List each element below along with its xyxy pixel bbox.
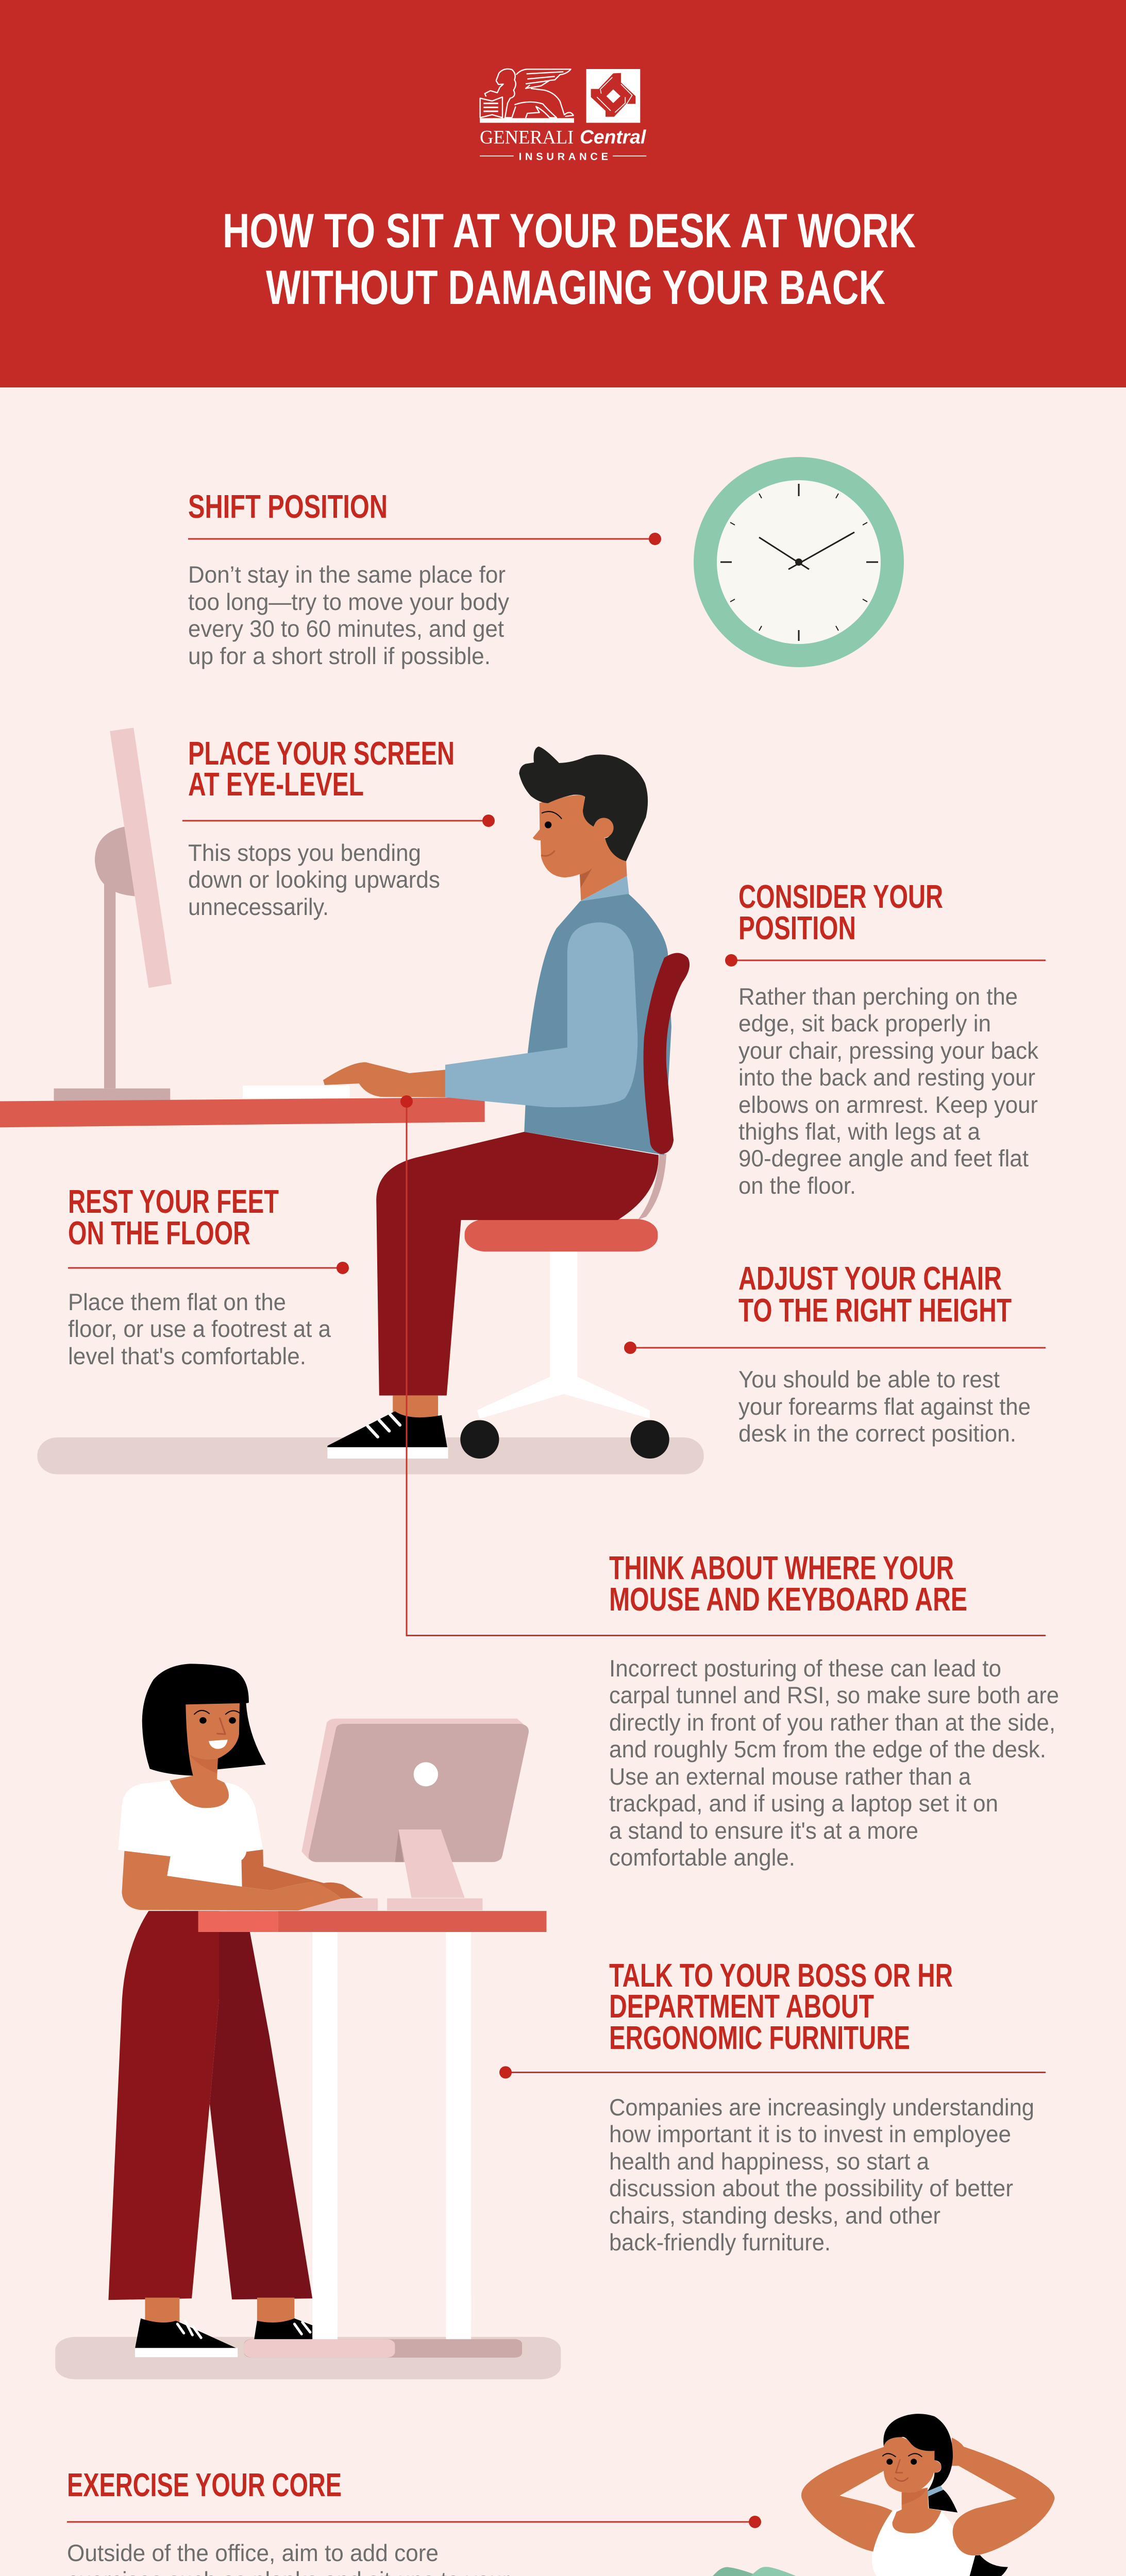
callout line [725, 954, 1046, 967]
heading: place your screen: PLACE YOUR SCREEN [188, 735, 455, 772]
chair base [460, 1154, 669, 1459]
body text [188, 561, 509, 669]
body text: trackpad, and if using a laptop set it on [609, 1790, 998, 1817]
body text: Don’t stay in the same place for [188, 561, 506, 588]
body text [188, 839, 440, 920]
body text: thighs flat, with legs at a [738, 1118, 980, 1145]
illustration: woman at standing desk [55, 1664, 561, 2379]
body text: Use an external mouse rather than a [609, 1763, 971, 1790]
heading: CONSIDER YOUR [738, 878, 943, 915]
floor [37, 1437, 704, 1475]
panel: mouse and keyboard [609, 1549, 1059, 1871]
body text: down or looking upwards [188, 866, 440, 893]
body text: carpal tunnel and RSI, so make sure both are [609, 1682, 1059, 1708]
icon: clock [694, 457, 904, 667]
body text [609, 2094, 1034, 2256]
body text: and roughly 5cm from the edge of the desk. [609, 1736, 1046, 1762]
heading: POSITION [738, 909, 856, 946]
title: HOW TO SIT AT YOUR DESK AT WORK [223, 204, 916, 258]
arm and hand [323, 922, 637, 1107]
logo: Generali Central Insurance: INSURANCE [519, 151, 608, 162]
logo: Generali Central Insurance: GENERALI [480, 126, 574, 148]
body text [738, 1366, 1031, 1447]
heading [609, 1957, 953, 2056]
body text: health and happiness, so start a [609, 2148, 929, 2175]
body text: floor, or use a footrest at a [68, 1315, 331, 1342]
heading: place your screen [188, 735, 455, 803]
body text: up for a short stroll if possible. [188, 642, 491, 669]
heading: ON THE FLOOR [68, 1214, 250, 1251]
callout line [188, 533, 661, 545]
body text: Place them flat on the [68, 1289, 286, 1315]
body text: every 30 to 60 minutes, and get [188, 615, 504, 642]
body text: unnecessarily. [188, 893, 329, 920]
heading [68, 1183, 279, 1251]
title [223, 204, 916, 314]
desk, monitor, trousers [108, 1719, 546, 2321]
body text: your forearms flat against the [738, 1393, 1031, 1420]
body text: 90-degree angle and feet flat [738, 1145, 1029, 1172]
body text: Companies are increasingly understanding [609, 2094, 1034, 2121]
heading [609, 1549, 967, 1618]
body text: your chair, pressing your back [738, 1037, 1039, 1064]
panel: screen at eye level [0, 727, 495, 1127]
heading: ADJUST YOUR CHAIR [738, 1260, 1002, 1297]
panel: consider your position [725, 878, 1046, 1199]
heading [738, 1260, 1012, 1329]
body text [738, 983, 1039, 1199]
body text: too long—try to move your body [188, 588, 509, 615]
trousers [376, 1132, 659, 1396]
heading: shift position: SHIFT POSITION [188, 488, 388, 525]
body text: Incorrect posturing of these can lead to [609, 1655, 1001, 1682]
heading: TO THE RIGHT HEIGHT [738, 1292, 1012, 1329]
heading: ERGONOMIC FURNITURE [609, 2019, 910, 2056]
connector line from desk to mouse and keyboard section [400, 1095, 1046, 1635]
chair seat [465, 1219, 658, 1251]
body text: level that's comfortable. [68, 1343, 306, 1369]
panel: ergonomic furniture [499, 1957, 1046, 2256]
floor and desk base [55, 2295, 561, 2379]
foot and shoe [327, 1396, 448, 1459]
body text: Rather than perching on the [738, 983, 1018, 1010]
body text: back-friendly furniture. [609, 2229, 831, 2256]
heading [738, 878, 943, 946]
logo: Generali Central Insurance: Central [580, 126, 646, 147]
callout line [68, 1262, 349, 1274]
callout line [67, 2516, 761, 2528]
body text: directly in front of you rather than at the side, [609, 1709, 1055, 1736]
body text: Outside of the office, aim to add core [67, 2539, 439, 2566]
panel: rest your feet [68, 1183, 349, 1369]
callout line [499, 2066, 1046, 2078]
callout line [624, 1342, 1046, 1354]
feet and shoes [135, 2298, 312, 2357]
header band [0, 0, 1126, 387]
heading: DEPARTMENT ABOUT [609, 1988, 874, 2025]
heading: place your screen: AT EYE-LEVEL [188, 766, 364, 803]
body text: a stand to ensure it's at a more [609, 1817, 918, 1844]
panel: exercise your core [66, 2414, 1055, 2576]
body text [609, 1655, 1059, 1871]
chair back [644, 953, 690, 1154]
body text [68, 1289, 331, 1369]
illustration: seated man on chair [37, 747, 704, 1475]
heading: EXERCISE YOUR CORE [67, 2466, 342, 2503]
head, shirt and arms [118, 1664, 363, 1910]
body text: desk in the correct position. [738, 1420, 1016, 1447]
body text: elbows on armrest. Keep your [738, 1091, 1038, 1118]
body text: chairs, standing desks, and other [609, 2202, 940, 2229]
panel: adjust your chair [624, 1260, 1046, 1447]
body text: You should be able to rest [738, 1366, 1000, 1393]
body text: comfortable angle. [609, 1844, 795, 1871]
panel: shift position [188, 457, 904, 669]
illustration: woman doing sit-ups on mat [495, 2414, 1055, 2576]
illustration: monitor on desk [0, 727, 485, 1127]
callout line [182, 815, 495, 827]
heading: TALK TO YOUR BOSS OR HR [609, 1957, 953, 1994]
heading: MOUSE AND KEYBOARD ARE [609, 1581, 967, 1618]
body text [66, 2539, 522, 2576]
body text: discussion about the possibility of better [609, 2175, 1013, 2201]
head and neck [519, 747, 648, 901]
body text: into the back and resting your [738, 1064, 1035, 1091]
heading: REST YOUR FEET [68, 1183, 279, 1220]
title: WITHOUT DAMAGING YOUR BACK [266, 260, 885, 314]
body text: This stops you bending [188, 839, 421, 866]
torso: vest [524, 894, 671, 1155]
body text: on the floor. [738, 1172, 856, 1199]
logo: Generali Central Insurance [480, 69, 646, 162]
heading: THINK ABOUT WHERE YOUR [609, 1549, 954, 1586]
body text: edge, sit back properly in [738, 1010, 991, 1037]
body text: how important it is to invest in employee [609, 2121, 1011, 2147]
